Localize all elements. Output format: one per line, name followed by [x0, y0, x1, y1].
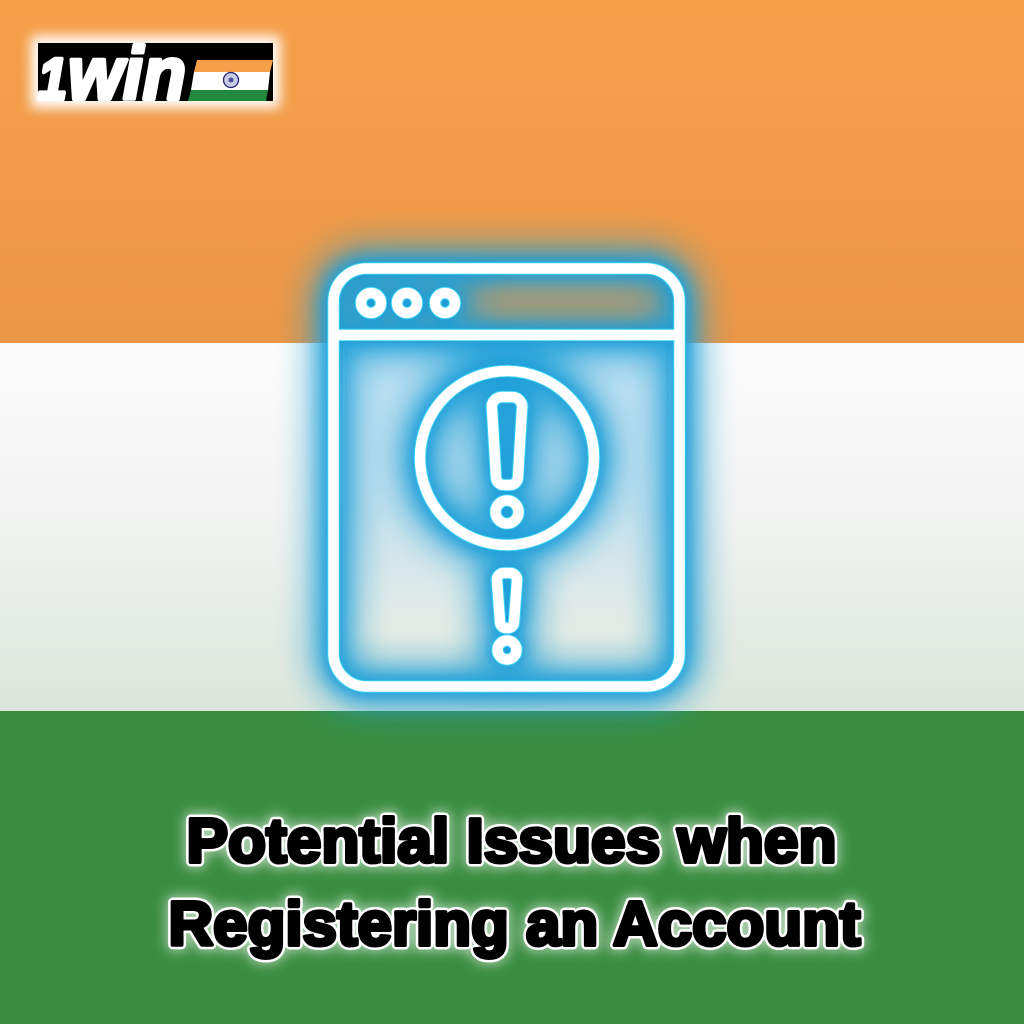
- background: white band: [0, 343, 1024, 711]
- title outline: [168, 807, 860, 959]
- background: orange band: [0, 0, 1024, 343]
- logo glow: [31, 36, 280, 108]
- title: [168, 807, 860, 959]
- title glow: Registering an Account: [168, 890, 860, 959]
- logo flag: [188, 60, 273, 101]
- logo wordmark: win: [68, 32, 186, 115]
- title outline: Registering an Account: [168, 890, 860, 959]
- icon glow: [334, 268, 680, 686]
- icon: browser window with warning signs: [334, 268, 680, 686]
- logo wordmark: 1: [38, 47, 67, 112]
- icon strokes: [334, 268, 680, 686]
- title glow: Potential Issues when: [186, 807, 836, 876]
- background: green band: [0, 711, 1024, 1024]
- logo: 1win India: [31, 32, 280, 115]
- title glow: [168, 807, 860, 959]
- logo black plate: [38, 43, 273, 101]
- title outline: Potential Issues when: [186, 807, 836, 876]
- title text: [168, 807, 860, 959]
- title text: Potential Issues when: [186, 807, 836, 876]
- title text: Registering an Account: [168, 890, 860, 959]
